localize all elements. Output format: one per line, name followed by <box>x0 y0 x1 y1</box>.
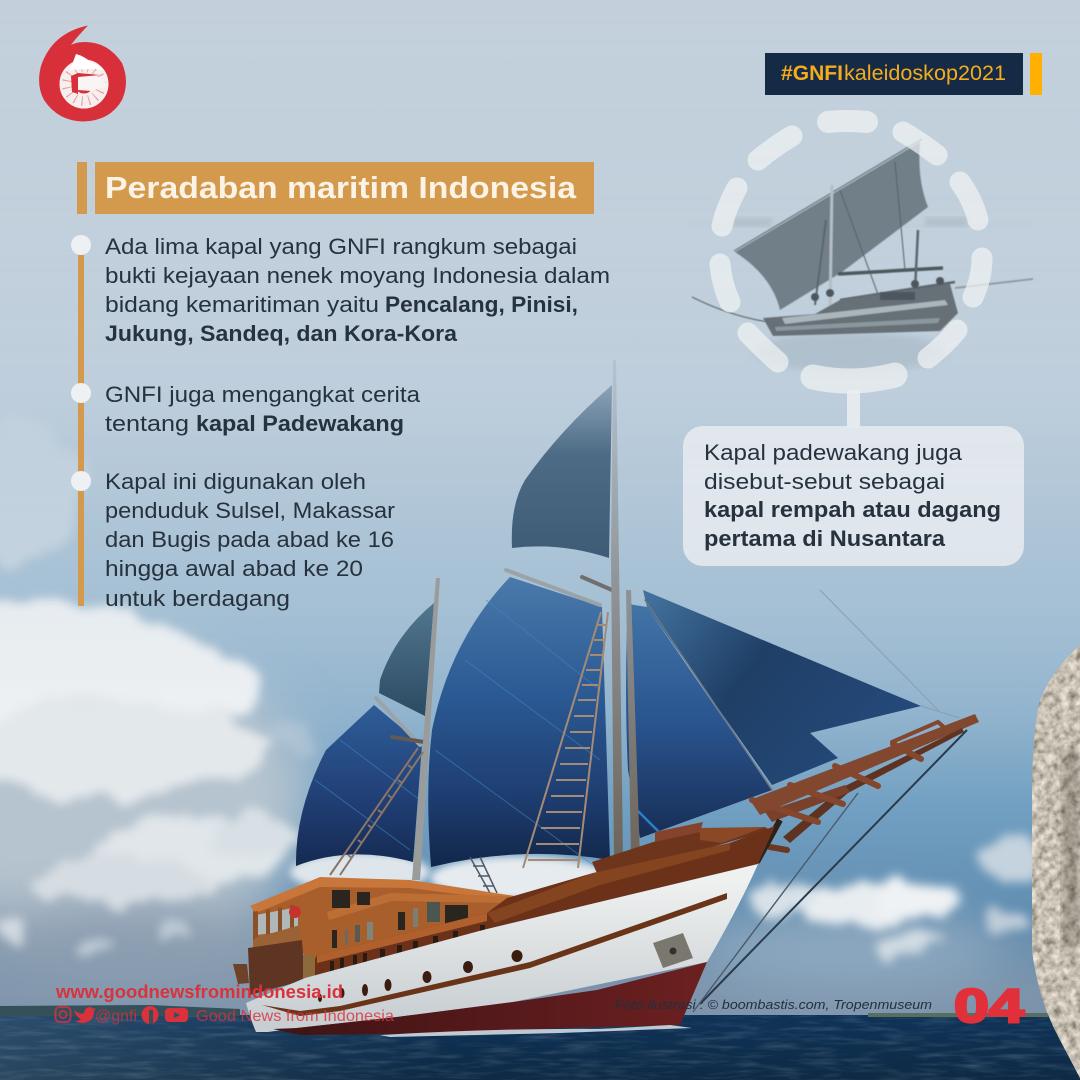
icon: facebook <box>142 1006 158 1024</box>
rope ladder: mizzen <box>330 748 423 875</box>
text block: usage history <box>105 469 395 611</box>
hashtag badge: kaleidoskop2021 <box>844 62 1006 85</box>
rope ladder: small <box>470 857 497 893</box>
maroon lower hull <box>273 962 707 1035</box>
portholes <box>318 950 522 1002</box>
text block: five ships: bidang kemaritiman yaitu <box>105 292 379 317</box>
fore rigging <box>820 590 960 718</box>
reflection <box>755 332 945 372</box>
bullet timeline <box>71 235 91 606</box>
text block: five ships: Jukung, Sandeq, dan Kora-Kora <box>105 321 458 346</box>
foredeck timber <box>592 827 770 880</box>
masts <box>412 360 640 880</box>
text block: five ships: Pencalang, Pinisi, <box>385 292 578 317</box>
title <box>77 162 594 214</box>
hashtag badge <box>765 53 1023 95</box>
sail seams <box>315 600 600 870</box>
masts and spars <box>692 185 1033 322</box>
GNFI logo <box>39 26 126 122</box>
logo: white G emblem <box>67 54 108 101</box>
rope ladder: main <box>523 612 608 868</box>
sail: fore <box>626 604 772 838</box>
hashtag badge: #GNFI <box>781 62 843 85</box>
background: sea <box>0 1005 1080 1080</box>
dashed circle frame <box>720 121 982 381</box>
spars <box>376 570 772 790</box>
sail <box>735 142 928 310</box>
modern pinisi ship <box>233 360 979 1037</box>
text block: five ships <box>105 234 610 346</box>
sail: jib <box>643 590 921 785</box>
text block: usage history: hingga awal abad ke 20 <box>105 556 363 581</box>
callout: spice ship: Kapal padewakang juga <box>704 440 963 465</box>
wood sheen <box>487 843 730 923</box>
footer: website and socials: www.goodnewsfromindonesia.id <box>55 982 343 1002</box>
rock texture at right edge <box>1032 645 1080 1078</box>
sail: mizzen <box>296 705 422 866</box>
text block: padewakang story: tentang <box>105 411 189 436</box>
logo: red swirl <box>39 26 126 122</box>
bow wave <box>380 1025 692 1037</box>
callout connector <box>847 390 860 428</box>
upper hull wood <box>305 826 775 980</box>
icon: twitter <box>74 1007 96 1023</box>
sail: main <box>428 577 610 867</box>
cabin rail <box>317 913 487 963</box>
text block: padewakang story: GNFI juga mengangkat cerita <box>105 382 421 407</box>
icon: youtube <box>165 1008 188 1022</box>
hull plate <box>653 933 693 968</box>
brown stripe <box>262 893 727 1016</box>
text block: usage history: dan Bugis pada abad ke 16 <box>105 527 394 552</box>
text block: usage history: untuk berdagang <box>105 586 290 611</box>
sail: main top <box>512 385 612 558</box>
rail posts <box>330 925 485 973</box>
white hull <box>246 864 758 1032</box>
footer: website and socials: Good News from Indonesia <box>196 1008 394 1025</box>
text block: usage history: penduduk Sulsel, Makassar <box>105 498 395 523</box>
title: Peradaban maritim Indonesia <box>105 170 577 205</box>
hull <box>763 284 958 336</box>
photo credit: Foto ilustrasi : © boombastis.com, Tropenmuseum <box>615 997 932 1012</box>
cabin <box>250 877 515 968</box>
footer: website and socials <box>55 982 394 1025</box>
bowsprit <box>750 714 979 862</box>
callout: spice ship: kapal rempah atau dagang <box>704 497 1001 522</box>
stern gallery <box>256 907 298 935</box>
text block: five ships: bukti kejayaan nenek moyang Indonesia dalam <box>105 263 610 288</box>
callout: spice ship <box>683 426 1024 566</box>
footer: website and socials: @gnfi <box>95 1008 137 1025</box>
text block: padewakang story: kapal Padewakang <box>196 411 404 436</box>
text block: five ships: Ada lima kapal yang GNFI rangkum sebagai <box>105 234 577 259</box>
background: clouds <box>0 420 1038 1000</box>
text block: padewakang story <box>105 382 421 436</box>
text block: usage history: Kapal ini digunakan oleh <box>105 469 366 494</box>
bow stays <box>693 730 967 1012</box>
cabin windows <box>332 890 468 948</box>
old padewakang ship photo <box>690 139 1033 372</box>
hashtag accent bar <box>1030 53 1042 95</box>
sail: mizzen top <box>379 603 434 716</box>
callout: spice ship: pertama di Nusantara <box>704 526 946 551</box>
distant islands <box>690 217 1030 227</box>
callout: spice ship: disebut-sebut sebagai <box>704 469 945 494</box>
page number: 04 <box>954 979 1024 1032</box>
stern block <box>248 940 305 995</box>
icon: instagram <box>56 1007 70 1022</box>
